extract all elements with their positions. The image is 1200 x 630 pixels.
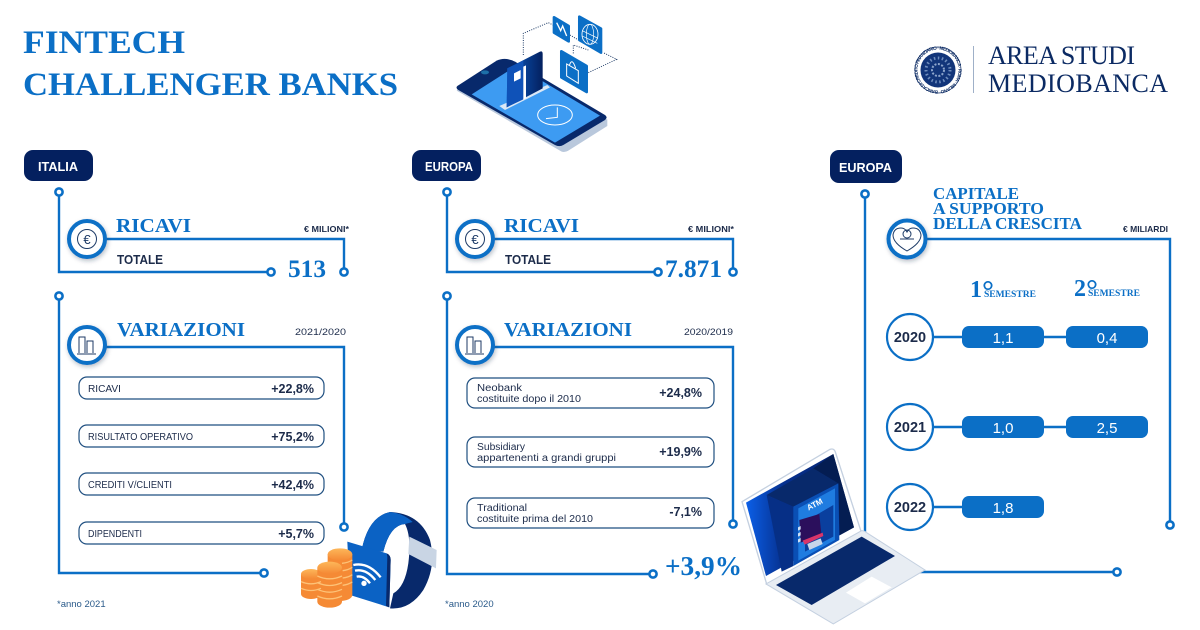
logo: Area Studi Mediobanca: MEDIOBANCA [988, 69, 1168, 98]
row: 2022 [887, 484, 1044, 530]
column header: first half: 1 [970, 277, 982, 303]
title: CHALLENGER BANKS [23, 67, 398, 103]
footnote: *anno 2021 [57, 599, 106, 610]
row: neobank: costituite dopo il 2010 [477, 394, 581, 405]
row: 2021 [887, 404, 1148, 450]
row: crediti [79, 473, 324, 495]
illustration: smartwatch and coins [301, 512, 437, 608]
row: 2022: 1,8 [993, 500, 1013, 517]
row: 2020 [887, 314, 1148, 360]
panel: variazioni Europa: VARIAZIONI [504, 319, 632, 341]
panel: Italia [24, 150, 350, 610]
logo: Area Studi Mediobanca: AREA STUDI [988, 41, 1135, 70]
badge: Italia [24, 150, 93, 181]
icon: bar chart [457, 327, 493, 363]
badge: Europa [830, 150, 902, 183]
logo: Area Studi Mediobanca [914, 41, 1168, 98]
panel: variazioni Italia [55, 292, 348, 577]
panel: ricavi Europa: € MILIONI* [688, 224, 735, 234]
row: traditional: costituite prima del 2010 [477, 514, 593, 525]
panel: Europa ricavi [412, 150, 742, 610]
column header: second half: SEMESTRE [1088, 289, 1140, 299]
row: risultato operativo: RISULTATO OPERATIVO [88, 432, 193, 443]
badge: Italia: ITALIA [38, 159, 79, 174]
icon: euro: € [471, 232, 479, 247]
row: subsidiary: +19,9% [659, 445, 702, 459]
row: risultato operativo: +75,2% [271, 430, 314, 444]
heading: capitale: CAPITALE [933, 184, 1019, 203]
illustration: smartphone with card and app icons [457, 17, 617, 152]
panel: Europa capitale: € MILIARDI [1123, 224, 1168, 234]
heading: capitale [933, 184, 1083, 233]
panel: ricavi Europa: RICAVI [504, 215, 579, 237]
icon: heart with coin [888, 220, 926, 258]
icon: euro [457, 221, 493, 257]
icon: bar chart [69, 327, 105, 363]
column header: first half: ° [982, 275, 994, 308]
panel: ricavi Italia: RICAVI [116, 215, 191, 237]
illustration: laptop with ATM: ATM [805, 496, 825, 512]
row: dipendenti: +5,7% [278, 527, 314, 541]
heading: capitale: DELLA CRESCITA [933, 214, 1083, 233]
row: traditional: Traditional [477, 503, 527, 514]
badge: Europa [412, 150, 481, 181]
icon: euro [69, 221, 105, 257]
title: FINTECH [23, 25, 185, 61]
panel: variazioni Europa: 2020/2019 [684, 327, 733, 338]
row: dipendenti [79, 522, 324, 544]
panel: variazioni Italia: 2021/2020 [295, 327, 346, 338]
row: 2021: 2021 [894, 420, 926, 436]
panel: variazioni Europa [443, 292, 742, 610]
illustration: laptop with ATM [742, 449, 925, 624]
row: 2020: 2020 [894, 330, 926, 346]
row: ricavi [79, 377, 324, 399]
row: risultato operativo [79, 425, 324, 447]
icon: euro: € [83, 232, 91, 247]
row: 2020: 1,1 [993, 330, 1013, 347]
badge: Europa: EUROPA [839, 160, 893, 175]
badge: Europa: EUROPA [425, 159, 474, 174]
panel: ricavi Italia: € MILIONI* [304, 224, 350, 234]
panel: ricavi Europa [443, 188, 737, 283]
row: subsidiary [467, 437, 714, 467]
column header: second half [1074, 274, 1140, 307]
row: 2020: 0,4 [1097, 330, 1117, 347]
row: crediti: CREDITI V/CLIENTI [88, 480, 172, 491]
panel: variazioni Italia: VARIAZIONI [117, 319, 245, 341]
row: neobank: +24,8% [659, 386, 702, 400]
logo seal: BANCA DI CREDITO FINANZIARIO · MEDIOBANCA · ROMA · MILANO [914, 46, 962, 94]
panel: Europa capitale [830, 150, 1174, 576]
panel: ricavi Europa: 7.871 [665, 256, 722, 283]
total change: +3,9% [665, 551, 742, 581]
footnote: *anno 2020 [445, 599, 494, 610]
row: dipendenti: DIPENDENTI [88, 529, 142, 540]
row: neobank: Neobank [477, 383, 523, 394]
row: crediti: +42,4% [271, 478, 314, 492]
row: subsidiary: Subsidiary [477, 442, 525, 453]
panel: ricavi Italia: TOTALE [117, 253, 163, 267]
column header: second half: 2 [1074, 276, 1086, 302]
row: neobank [467, 378, 714, 408]
column header: second half: ° [1086, 274, 1098, 307]
row: traditional: -7,1% [669, 505, 702, 519]
panel: ricavi Italia: 513 [288, 256, 326, 283]
row: traditional [467, 498, 714, 528]
row: ricavi: +22,8% [271, 382, 314, 396]
panel: ricavi Europa: TOTALE [505, 253, 551, 267]
row: 2021: 2,5 [1097, 420, 1117, 437]
title [23, 25, 398, 103]
row: subsidiary: appartenenti a grandi gruppi [477, 453, 616, 464]
row: 2021: 1,0 [993, 420, 1013, 437]
heading: capitale: A SUPPORTO [933, 199, 1044, 218]
row: 2022: 2022 [894, 500, 926, 516]
panel: ricavi Italia [55, 188, 350, 283]
row: ricavi: RICAVI [88, 384, 121, 395]
column header: first half: SEMESTRE [984, 290, 1036, 300]
column header: first half [970, 275, 1036, 308]
